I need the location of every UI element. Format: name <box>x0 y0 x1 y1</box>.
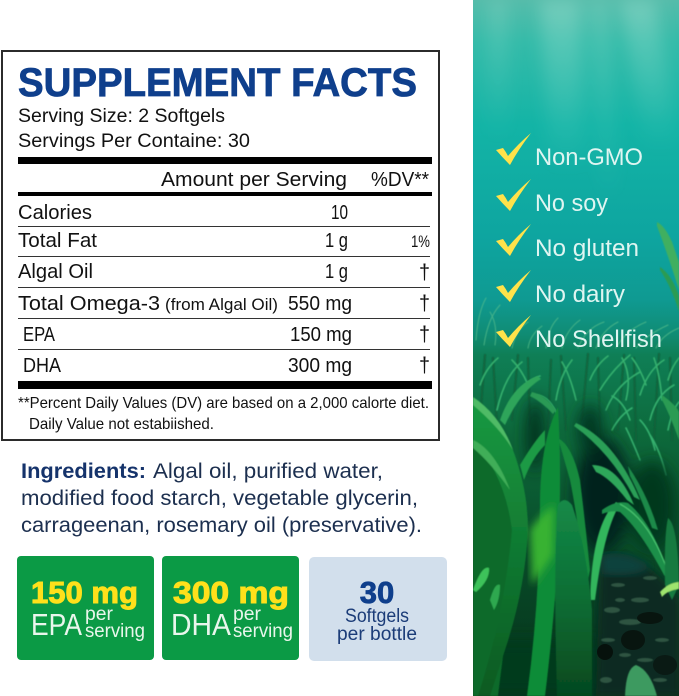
claim: No Shellfish <box>496 315 662 353</box>
serving info: Serving Size: 2 Softgels <box>18 105 225 127</box>
table rows: Calories <box>18 202 92 224</box>
badge: 300 mg DHA per serving: serving <box>233 621 293 642</box>
badge: 300 mg DHA per serving: DHA <box>171 607 231 642</box>
claim: No Shellfish: No Shellfish <box>535 326 662 353</box>
claim: No dairy <box>496 270 625 308</box>
ingredients text: carrageenan, rosemary oil (preservative). <box>21 514 422 537</box>
table rows: EPA <box>23 324 56 346</box>
footnote: **Percent Daily Values (DV) are based on a 2,000 calorte diet. <box>18 395 429 412</box>
claim: No dairy: No dairy <box>535 281 625 308</box>
footnote: Daily Value not estabiished. <box>29 416 214 433</box>
badge: 150 mg EPA per serving: EPA <box>31 607 82 642</box>
table rows: DHA <box>23 355 62 377</box>
claims list <box>496 133 662 353</box>
claim: No soy: No soy <box>535 190 608 217</box>
claim: No gluten: No gluten <box>535 235 639 262</box>
claim: Non-GMO: Non-GMO <box>535 144 643 171</box>
serving info: Servings Per Containe: 30 <box>18 130 250 152</box>
panel: underwater seaweed photo <box>473 0 679 696</box>
badge: 300 mg DHA per serving <box>162 556 299 660</box>
badge: 30 softgels per bottle <box>309 557 447 661</box>
badge: 150 mg EPA per serving: per <box>85 604 114 625</box>
badge: 30 softgels per bottle: per bottle <box>337 624 417 645</box>
table rows: 300 mg <box>288 355 352 377</box>
table column headers: Amount per Serving <box>161 169 347 191</box>
foreground leaves <box>473 397 592 696</box>
badge: 30 softgels per bottle: Softgels <box>345 606 409 627</box>
serving info <box>18 105 250 152</box>
table rows: 550 mg <box>288 293 352 315</box>
table rows: 1% <box>411 232 430 251</box>
distant grass fringe <box>476 298 679 475</box>
table rows: Total Fat <box>18 230 97 252</box>
ingredients text <box>21 460 422 537</box>
table rows: Algal Oil <box>18 261 93 283</box>
table rows <box>18 202 430 377</box>
table rows: † <box>419 292 430 315</box>
ingredients text: Algal oil, purified water, <box>153 460 383 483</box>
claim: No gluten <box>496 224 639 262</box>
table rules <box>18 157 432 389</box>
heading: supplement facts: SUPPLEMENT FACTS <box>18 61 417 105</box>
ingredients text: Ingredients: <box>21 460 146 483</box>
footnote <box>18 395 429 433</box>
panel: supplement facts label <box>2 51 439 440</box>
badge: 150 mg EPA per serving: 150 mg <box>31 575 138 610</box>
table column headers <box>161 169 429 191</box>
badge: 300 mg DHA per serving: 300 mg <box>173 575 289 610</box>
badge: 30 softgels per bottle: 30 <box>360 575 394 610</box>
table rows: † <box>419 323 430 346</box>
table rows: Total Omega-3 <box>18 293 160 315</box>
table column headers: %DV** <box>371 169 429 191</box>
ingredients text: modified food starch, vegetable glycerin, <box>21 487 418 510</box>
table rows: † <box>419 354 430 377</box>
table rows: 1 g <box>325 230 348 252</box>
table rows: 10 <box>331 202 348 224</box>
mid-ground curved blades <box>500 222 679 600</box>
dark gaps between the plants <box>518 394 679 558</box>
table rows: (from Algal Oil) <box>165 296 278 314</box>
badge: 300 mg DHA per serving: per <box>233 604 262 625</box>
claim: Non-GMO <box>496 133 643 171</box>
sea floor <box>596 554 679 696</box>
badge: 150 mg EPA per serving: serving <box>85 621 145 642</box>
table rows: † <box>419 261 430 284</box>
badge: 150 mg EPA per serving <box>17 556 154 660</box>
claim: No soy <box>496 179 608 217</box>
table rows: 1 g <box>325 261 348 283</box>
table rows: 150 mg <box>290 324 352 346</box>
